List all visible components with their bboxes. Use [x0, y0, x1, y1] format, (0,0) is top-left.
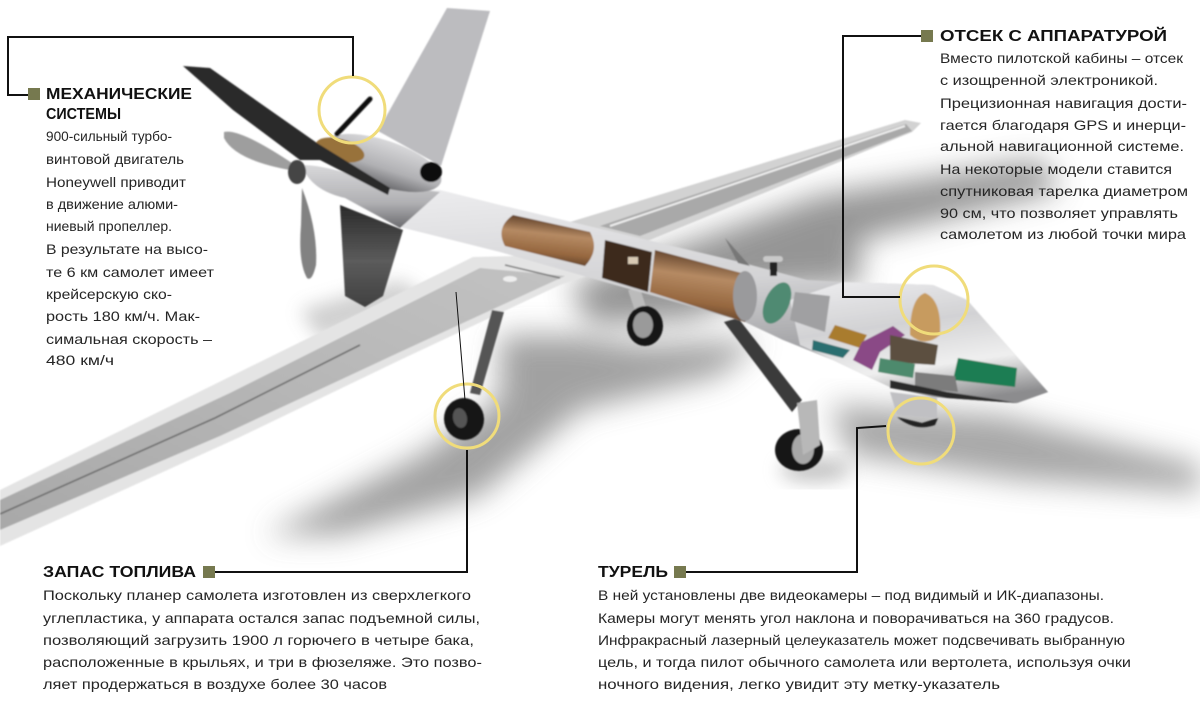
fin on top of fuselage [725, 238, 750, 266]
body text: mechanical systems: Honeywell приводит [46, 174, 187, 190]
main wheel right [627, 306, 663, 346]
drone aircraft [0, 8, 1048, 546]
leader line: mechanical systems [8, 37, 353, 95]
heading: equipment bay: ОТСЕК С АППАРАТУРОЙ [940, 26, 1167, 45]
engine cowling [316, 122, 448, 204]
body text: equipment bay: Прецизионная навигация дости- [940, 95, 1187, 111]
propeller hub [288, 160, 306, 184]
propeller blade upper [224, 132, 295, 170]
body text: mechanical systems: в движение алюми- [46, 196, 178, 212]
leader line: fuel reserve [215, 450, 467, 572]
exhaust nozzle [420, 162, 442, 182]
body text: fuel reserve: углепластика, у аппарата остался запас подъемной силы, [43, 610, 480, 626]
body text: equipment bay: с изощренной электроникой. [940, 72, 1158, 88]
body text: mechanical systems [46, 128, 215, 368]
body text: fuel reserve [43, 587, 482, 692]
body text: equipment bay: самолетом из любой точки мира [940, 226, 1186, 242]
body text: fuel reserve: ляет продержаться в воздухе более 30 часов [43, 676, 387, 692]
body text: fuel reserve: позволяющий загрузить 1900 л горючего в четыре бака, [43, 632, 474, 648]
body text: mechanical systems: ниевый пропеллер. [46, 218, 172, 234]
fuselage [395, 190, 1048, 403]
fuel tank 2 [602, 240, 652, 292]
body text: turret: В ней установлены две видеокамеры – под видимый и ИК-диапазоны. [598, 587, 1104, 603]
leader line: turret [686, 426, 886, 572]
drone ground shadow [265, 160, 1200, 535]
heading: mechanical systems: МЕХАНИЧЕСКИЕ [46, 86, 192, 103]
lower tail fin [340, 205, 403, 307]
body text: mechanical systems: рость 180 км/ч. Мак- [46, 308, 200, 324]
main landing gear strut right [628, 288, 650, 320]
marker square [203, 566, 215, 578]
turret [890, 392, 938, 427]
body text: mechanical systems: 480 км/ч [46, 352, 114, 368]
body text: fuel reserve: расположенные в крыльях, и три в фюзеляже. Это позво- [43, 654, 482, 670]
leader line: equipment bay [843, 36, 921, 297]
body text: turret [598, 587, 1131, 692]
marker square [921, 30, 933, 42]
body text: turret: цель, и тогда пилот обычного самолета или вертолета, используя очки [598, 654, 1131, 670]
body text: equipment bay: На некоторые модели ставится [940, 161, 1172, 177]
marker square [674, 566, 686, 578]
heading: turret: ТУРЕЛЬ [598, 564, 668, 581]
body text: mechanical systems: 900-сильный турбо- [46, 128, 172, 144]
forward cowl [302, 165, 440, 228]
body text: equipment bay: спутниковая тарелка диаметром [940, 183, 1188, 199]
fuel tank 1 [501, 215, 594, 266]
marker square [28, 88, 40, 100]
main wheel left [440, 394, 488, 444]
propeller blade lower [300, 188, 316, 279]
body text: mechanical systems: те 6 км самолет имеет [46, 264, 215, 280]
engine orange accent [313, 133, 367, 167]
dark stabilizer [183, 66, 390, 195]
body text: mechanical systems: симальная скорость – [46, 331, 212, 347]
body text: mechanical systems: В результате на высо- [46, 241, 208, 257]
heading line 2: СИСТЕМЫ [46, 106, 121, 123]
body text: turret: Камеры могут менять угол наклона и поворачиваться на 360 градусов. [598, 610, 1114, 626]
heading: fuel reserve: ЗАПАС ТОПЛИВА [43, 564, 196, 581]
body text: equipment bay: альной навигационной системе. [940, 138, 1184, 154]
fuel tank 3 [650, 250, 754, 322]
body text: turret: Инфракрасный лазерный целеуказатель может подсвечивать выбранную [598, 632, 1125, 648]
tank tag [628, 257, 638, 264]
canopy [790, 282, 1048, 403]
body text: turret: ночного видения, легко увидит эту метку-указатель [598, 676, 1000, 692]
body text: equipment bay [940, 50, 1188, 242]
antenna blade [337, 99, 370, 134]
callout panel: turret [598, 426, 1131, 692]
avionics bay equipment [757, 278, 1017, 403]
upper tail fin [378, 8, 490, 166]
body text: equipment bay: гается благодаря GPS и инерци- [940, 117, 1186, 133]
body text: mechanical systems: винтовой двигатель [46, 151, 184, 167]
body text: mechanical systems: крейсерскую ско- [46, 286, 172, 302]
body text: equipment bay: Вместо пилотской кабины – отсек [940, 50, 1184, 66]
right wing [570, 120, 921, 250]
left wing [0, 256, 590, 546]
thin wing leader line [456, 292, 465, 400]
highlight circles [319, 77, 968, 464]
callout panel: mechanical systems [8, 37, 353, 368]
main landing gear strut [470, 310, 504, 395]
body text: fuel reserve: Поскольку планер самолета изготовлен из сверхлегкого [43, 587, 471, 603]
callout panel: fuel reserve [43, 292, 482, 692]
body text: equipment bay: 90 см, что позволяет управлять [940, 205, 1178, 221]
callout panel: equipment bay [843, 26, 1188, 297]
tank end cap [733, 271, 757, 321]
satcom antenna [763, 256, 783, 276]
nose landing gear [724, 318, 823, 471]
satellite dish [910, 293, 940, 342]
